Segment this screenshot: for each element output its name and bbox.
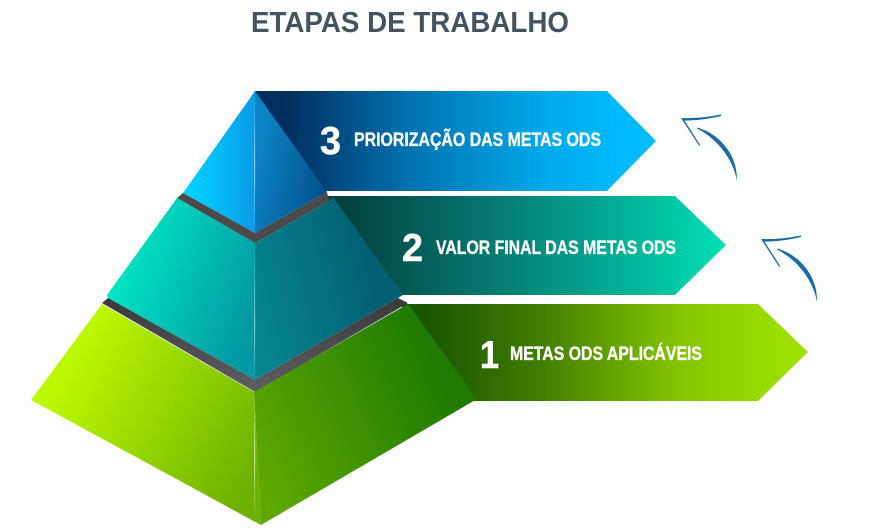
- label 1: METAS ODS APLICÁVEIS: [510, 343, 702, 365]
- banner 2: valor final das metas ODS: [322, 196, 726, 295]
- number 2: 2: [402, 227, 423, 270]
- banner 3: priorização das metas ODS: [255, 91, 656, 191]
- pyramid: [31, 91, 477, 525]
- label 2: VALOR FINAL DAS METAS ODS: [436, 238, 676, 259]
- number 3: 3: [320, 120, 341, 163]
- pyramid top tier: [183, 91, 327, 233]
- arrow: lower curved arrow: [761, 236, 817, 302]
- upper divider band: [177, 192, 329, 243]
- arrow: upper curved arrow: [681, 114, 737, 181]
- number 1: 1: [480, 334, 499, 377]
- title: ETAPAS DE TRABALHO: [251, 7, 569, 39]
- pyramid bottom tier: [31, 304, 477, 525]
- label 3: PRIORIZAÇÃO DAS METAS ODS: [354, 129, 601, 151]
- pyramid middle tier: [107, 197, 403, 380]
- lower divider band: [102, 298, 408, 392]
- banner 1: metas ODS aplicáveis: [400, 304, 808, 401]
